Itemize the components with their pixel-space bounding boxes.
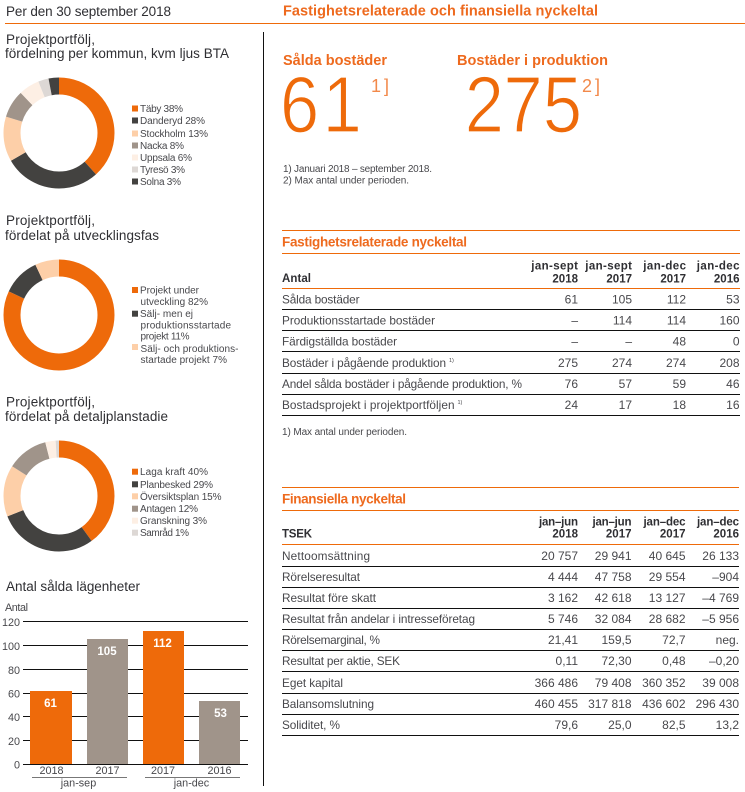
table rows: 4 444 [548, 570, 578, 584]
table rows: 47 758 [595, 570, 632, 584]
table rows: 105 [612, 292, 632, 306]
table rows: 317 818 [588, 697, 632, 711]
table rows: Sålda bostäder [282, 292, 360, 306]
heading: financial key figures: Finansiella nyckeltal [282, 491, 406, 506]
y axis labels [2, 617, 20, 772]
table header: 2017 [606, 273, 632, 285]
x axis labels: jan-dec [173, 778, 210, 790]
bar values: 105 [97, 646, 117, 658]
heading: zoning stage [5, 394, 168, 424]
heading: homes in production: Bostäder i produktion [457, 53, 608, 69]
table header: jan-sept [530, 260, 578, 272]
legend: zoning stage: Översiktsplan 15% [140, 491, 222, 503]
table rows: 32 084 [595, 612, 632, 626]
legend: municipality: Nacka 8% [140, 141, 184, 152]
table rows: 114 [613, 314, 632, 328]
y axis labels: 80 [8, 665, 20, 677]
table header: Antal [282, 273, 311, 285]
table rows: 275 [558, 356, 578, 370]
legend: municipality: Danderyd 28% [140, 116, 205, 127]
table rows: 0 [733, 334, 740, 348]
table rows: Rörelseresultat [282, 570, 361, 584]
table footnote: 1) Max antal under perioden. [282, 427, 407, 438]
table rows: 274 [666, 356, 686, 370]
x axis labels: jan-sep [60, 778, 96, 790]
heading: municipality: Projektportfölj, [6, 32, 95, 47]
donut chart: municipality [12, 86, 106, 180]
table rows: –904 [712, 570, 739, 584]
table rows: 72,30 [601, 654, 632, 668]
panel: bar chart sold apartments [2, 579, 248, 790]
table header [282, 260, 740, 285]
table rows: 1) [449, 358, 454, 364]
panel: donut by development phase [5, 213, 238, 366]
table header: jan-dec [696, 260, 740, 272]
bars [30, 631, 240, 764]
table rows: 0,11 [556, 654, 578, 668]
donut chart: development phase [12, 268, 106, 362]
heading: development phase: Projektportfölj, [6, 213, 95, 228]
heading: municipality [5, 32, 229, 61]
left header: date: Per den 30 september 2018 [6, 4, 171, 19]
table header: 2017 [660, 529, 686, 541]
table rows: 46 [726, 377, 740, 391]
legend: development phase: Sälj- och produktions- [140, 344, 238, 355]
table rows: –4 769 [702, 591, 739, 605]
heading: zoning stage: Projektportfölj, [6, 394, 95, 410]
legend: municipality: Stockholm 13% [140, 129, 208, 140]
table rows: –5 956 [702, 612, 739, 626]
legend: zoning stage: Laga kraft 40% [140, 467, 208, 478]
table rows: 57 [619, 377, 632, 391]
key figure footnotes [283, 164, 432, 186]
legend: zoning stage: Granskning 3% [140, 516, 207, 527]
bar values [44, 638, 227, 720]
table rows: Balansomslutning [282, 697, 374, 711]
legend: zoning stage: Antagen 12% [140, 504, 198, 515]
table rows: – [571, 314, 578, 328]
table rows: Färdigställda bostäder [282, 334, 397, 348]
big number 61: 61 [280, 60, 362, 149]
table rows: 61 [565, 292, 578, 306]
bar values: 112 [153, 638, 172, 650]
table rows: 24 [565, 398, 578, 412]
heading: sold apartments: Antal sålda lägenheter [6, 579, 140, 594]
table rows: Nettoomsättning [282, 549, 370, 563]
table rows: 20 757 [541, 549, 578, 563]
y axis labels: 20 [8, 736, 20, 748]
table header: 2018 [552, 273, 579, 285]
page title: Fastighetsrelaterade och finansiella nyckeltal [283, 4, 598, 20]
legend: development phase: Sälj- men ej [140, 309, 193, 320]
y axis labels: 100 [2, 641, 20, 653]
table rows: Resultat per aktie, SEK [282, 654, 400, 668]
table rows: Bostäder i pågående produktion [282, 356, 446, 370]
legend: municipality: Uppsala 6% [140, 153, 192, 164]
panel: donut by municipality [5, 32, 229, 188]
panel: donut by zoning stage [5, 394, 222, 543]
legend: development phase: projekt 11% [140, 332, 190, 342]
table rows: 39 008 [702, 676, 739, 690]
panel: key figure homes in production [457, 53, 608, 149]
heading: municipality: fördelning per kommun, kvm ljus BTA [5, 46, 229, 61]
legend: zoning stage: Samråd 1% [140, 527, 189, 539]
table rows: 48 [673, 334, 686, 348]
legend: development phase: utveckling 82% [140, 297, 208, 308]
table rows: 76 [565, 377, 578, 391]
table rows: 112 [667, 292, 686, 306]
bar values: 61 [44, 698, 57, 710]
heading: zoning stage: fördelat på detaljplanstadie [5, 409, 168, 424]
table rows: 53 [726, 292, 740, 306]
panel: key figure sold homes [280, 53, 389, 149]
table rows: 436 602 [642, 697, 686, 711]
bar chart grid [23, 622, 248, 764]
table rows [282, 549, 739, 732]
table rows: 18 [673, 398, 686, 412]
table rows: Resultat före skatt [282, 591, 377, 605]
legend: zoning stage [132, 467, 222, 539]
table rows: 3 162 [548, 591, 578, 605]
legend: municipality: Täby 38% [140, 104, 183, 115]
table rows: 79 408 [595, 676, 632, 690]
heading: sold homes: Sålda bostäder [283, 53, 387, 69]
heading: property key figures: Fastighetsrelaterade nyckeltal [282, 234, 467, 250]
big number 275: 275 [465, 60, 582, 149]
table rows: 16 [726, 398, 740, 412]
footnote mark 1: 1] [371, 76, 389, 96]
y axis labels: 0 [14, 760, 20, 772]
table rows: 21,41 [548, 633, 578, 647]
table header: jan–jun [592, 517, 632, 529]
table rows: Soliditet, % [282, 718, 340, 732]
table header [282, 517, 740, 541]
table: financial key figures [282, 488, 740, 736]
table rows: 42 618 [595, 591, 632, 605]
legend: municipality: Tyresö 3% [140, 165, 185, 176]
x axis labels: 2017 [151, 765, 175, 777]
table rows: 13,2 [716, 718, 739, 732]
table rows: neg. [716, 633, 739, 647]
heading: development phase: fördelat på utvecklingsfas [5, 228, 159, 243]
table rows: –0,20 [709, 654, 739, 668]
x axis labels: 2016 [207, 765, 232, 777]
x axis labels: 2017 [95, 765, 120, 777]
table rows: 0,48 [662, 654, 686, 668]
table rows: 360 352 [642, 676, 686, 690]
table header: jan–jun [538, 517, 578, 529]
y axis labels: 120 [2, 617, 20, 629]
table rows: 13 127 [649, 591, 686, 605]
axis title: Antal [5, 602, 28, 614]
table rows: 40 645 [649, 549, 686, 563]
table rows: 29 941 [595, 549, 632, 563]
table header: 2017 [606, 529, 632, 541]
heading: development phase [5, 213, 159, 243]
table rows: 460 455 [535, 697, 578, 711]
table rows: 79,6 [555, 718, 578, 732]
x axis labels: 2018 [39, 765, 64, 777]
table rows: 1) [458, 400, 463, 406]
key figure footnotes: 2) Max antal under perioden. [283, 176, 409, 186]
table rows: Resultat från andelar i intresseföretag [282, 612, 475, 626]
table rows: 25,0 [608, 718, 632, 732]
table header: 2016 [713, 529, 739, 541]
table rows: 160 [719, 314, 740, 328]
table rows: 28 682 [649, 612, 686, 626]
donut chart: zoning stage [12, 449, 106, 543]
y axis labels: 40 [8, 712, 20, 724]
table rows: 59 [673, 377, 686, 391]
table rows: Eget kapital [282, 676, 343, 690]
table rows: 26 133 [702, 549, 739, 563]
table rows: 159,5 [601, 633, 632, 647]
table header: 2018 [552, 529, 579, 541]
footnote mark 2: 2] [582, 76, 600, 96]
bar values: 53 [214, 708, 227, 720]
table rows: 72,7 [662, 633, 686, 647]
legend: municipality [132, 104, 208, 188]
table header: 2017 [660, 273, 686, 285]
legend: development phase: startade projekt 7% [140, 355, 227, 366]
table rows: – [625, 334, 632, 348]
table rows: 5 746 [548, 612, 578, 626]
table header: jan-dec [642, 260, 687, 272]
table rows: 274 [612, 356, 632, 370]
table rows: Rörelsemarginal, % [282, 633, 380, 647]
table header: jan-sept [584, 260, 632, 272]
legend: development phase [132, 286, 238, 366]
table rows: 208 [719, 356, 740, 370]
table rows: Bostadsprojekt i projektportföljen [282, 398, 454, 412]
table rows [282, 292, 740, 412]
table: property key figures [282, 230, 740, 438]
table rows: – [571, 334, 578, 348]
table rows: 82,5 [662, 718, 686, 732]
legend: development phase: produktionsstartade [140, 320, 231, 331]
table header: jan–dec [642, 517, 686, 529]
legend: municipality: Solna 3% [140, 177, 181, 188]
table header: 2016 [714, 273, 740, 285]
legend: zoning stage: Planbesked 29% [140, 480, 213, 491]
table header: jan–dec [696, 517, 740, 529]
x axis labels [39, 765, 232, 790]
legend: development phase: Projekt under [140, 286, 200, 296]
table header: TSEK [282, 528, 313, 540]
table rows: Produktionsstartade bostäder [282, 314, 435, 328]
table rows: 17 [619, 398, 632, 412]
table rows: 366 486 [535, 676, 578, 690]
key figure footnotes: 1) Januari 2018 – september 2018. [283, 164, 432, 175]
table rows: 29 554 [649, 570, 686, 584]
table rows: 296 430 [696, 697, 739, 711]
table rows: Andel sålda bostäder i pågående produktion, % [282, 377, 522, 391]
y axis labels: 60 [8, 688, 20, 700]
table rows: 114 [667, 314, 686, 328]
